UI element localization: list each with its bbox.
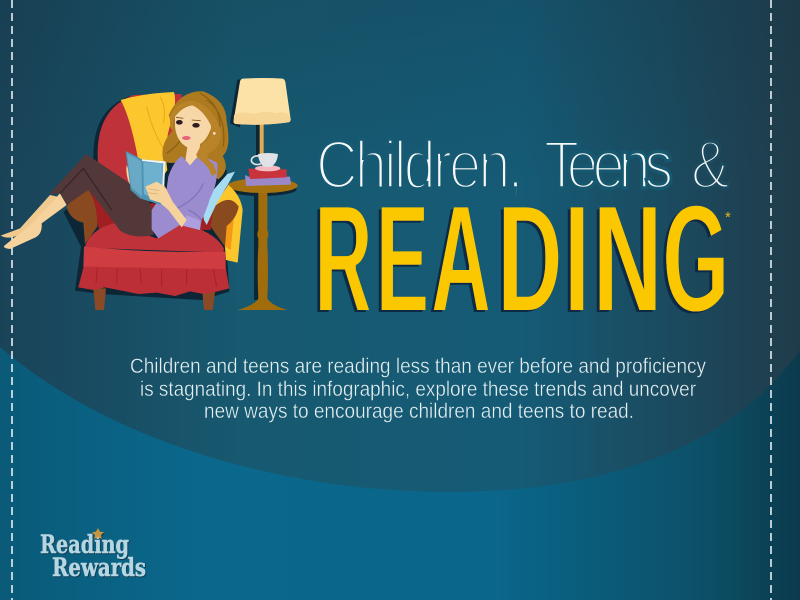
chair back <box>98 94 182 203</box>
lips <box>182 136 191 140</box>
earring <box>213 132 216 135</box>
intro paragraph <box>130 355 706 423</box>
lower foot and leg <box>4 193 67 249</box>
arm and hand <box>145 182 187 227</box>
right arm <box>211 200 239 247</box>
left hand <box>126 165 132 184</box>
trousers <box>49 154 154 236</box>
logo: Reading Rewards: Rewards <box>52 553 146 582</box>
icon: armchair <box>63 92 243 310</box>
asterisk: * <box>725 209 731 226</box>
icon: star <box>92 528 104 539</box>
title: READING: I <box>565 172 589 345</box>
chair shadow <box>63 96 229 300</box>
hair back <box>162 91 228 179</box>
illustration: woman reading in armchair beside lamp <box>1 78 298 310</box>
intro paragraph: Children and teens are reading less than ever before and proficiency <box>130 355 706 378</box>
book <box>126 151 165 206</box>
upper foot and leg <box>1 195 57 238</box>
front band <box>83 247 226 269</box>
blanket over chair back <box>121 92 175 202</box>
intro paragraph: is stagnating. In this infographic, explore these trends and uncover <box>140 378 696 401</box>
icon: woman reading <box>1 91 228 249</box>
title: Children, Teens &: & <box>691 128 730 203</box>
eyes <box>176 120 200 128</box>
logo: Reading Rewards: Reading <box>40 530 129 559</box>
eyebrows <box>176 117 201 121</box>
shirt <box>152 155 217 238</box>
icon: books and teacup <box>245 153 291 186</box>
intro paragraph: new ways to encourage children and teens to read. <box>204 400 634 423</box>
title: READING: G <box>663 172 729 345</box>
title: READING: R <box>315 172 372 345</box>
icon: floor lamp <box>230 78 291 155</box>
chair legs <box>93 288 106 310</box>
hair front <box>170 101 221 176</box>
stitched dashed border: left <box>11 0 13 600</box>
title: READING: E <box>376 172 428 345</box>
title: Children, Teens & <box>316 128 730 203</box>
stitched dashed border: right <box>770 0 772 600</box>
icon: cushion <box>202 172 235 225</box>
icon: side table <box>227 178 298 310</box>
frill <box>78 265 229 296</box>
logo: Reading Rewards <box>40 528 146 582</box>
title: Children, Teens &: Children, <box>316 128 523 203</box>
seat cushion <box>84 223 224 253</box>
blanket on right arm <box>213 185 243 263</box>
title: Children, Teens &: Teens <box>544 128 673 203</box>
title: READING: D <box>498 172 562 345</box>
left arm <box>67 190 97 244</box>
title: READING: N <box>593 172 662 345</box>
title: READING: A <box>431 172 491 345</box>
neck and face <box>175 105 211 165</box>
title: READING <box>315 172 729 345</box>
